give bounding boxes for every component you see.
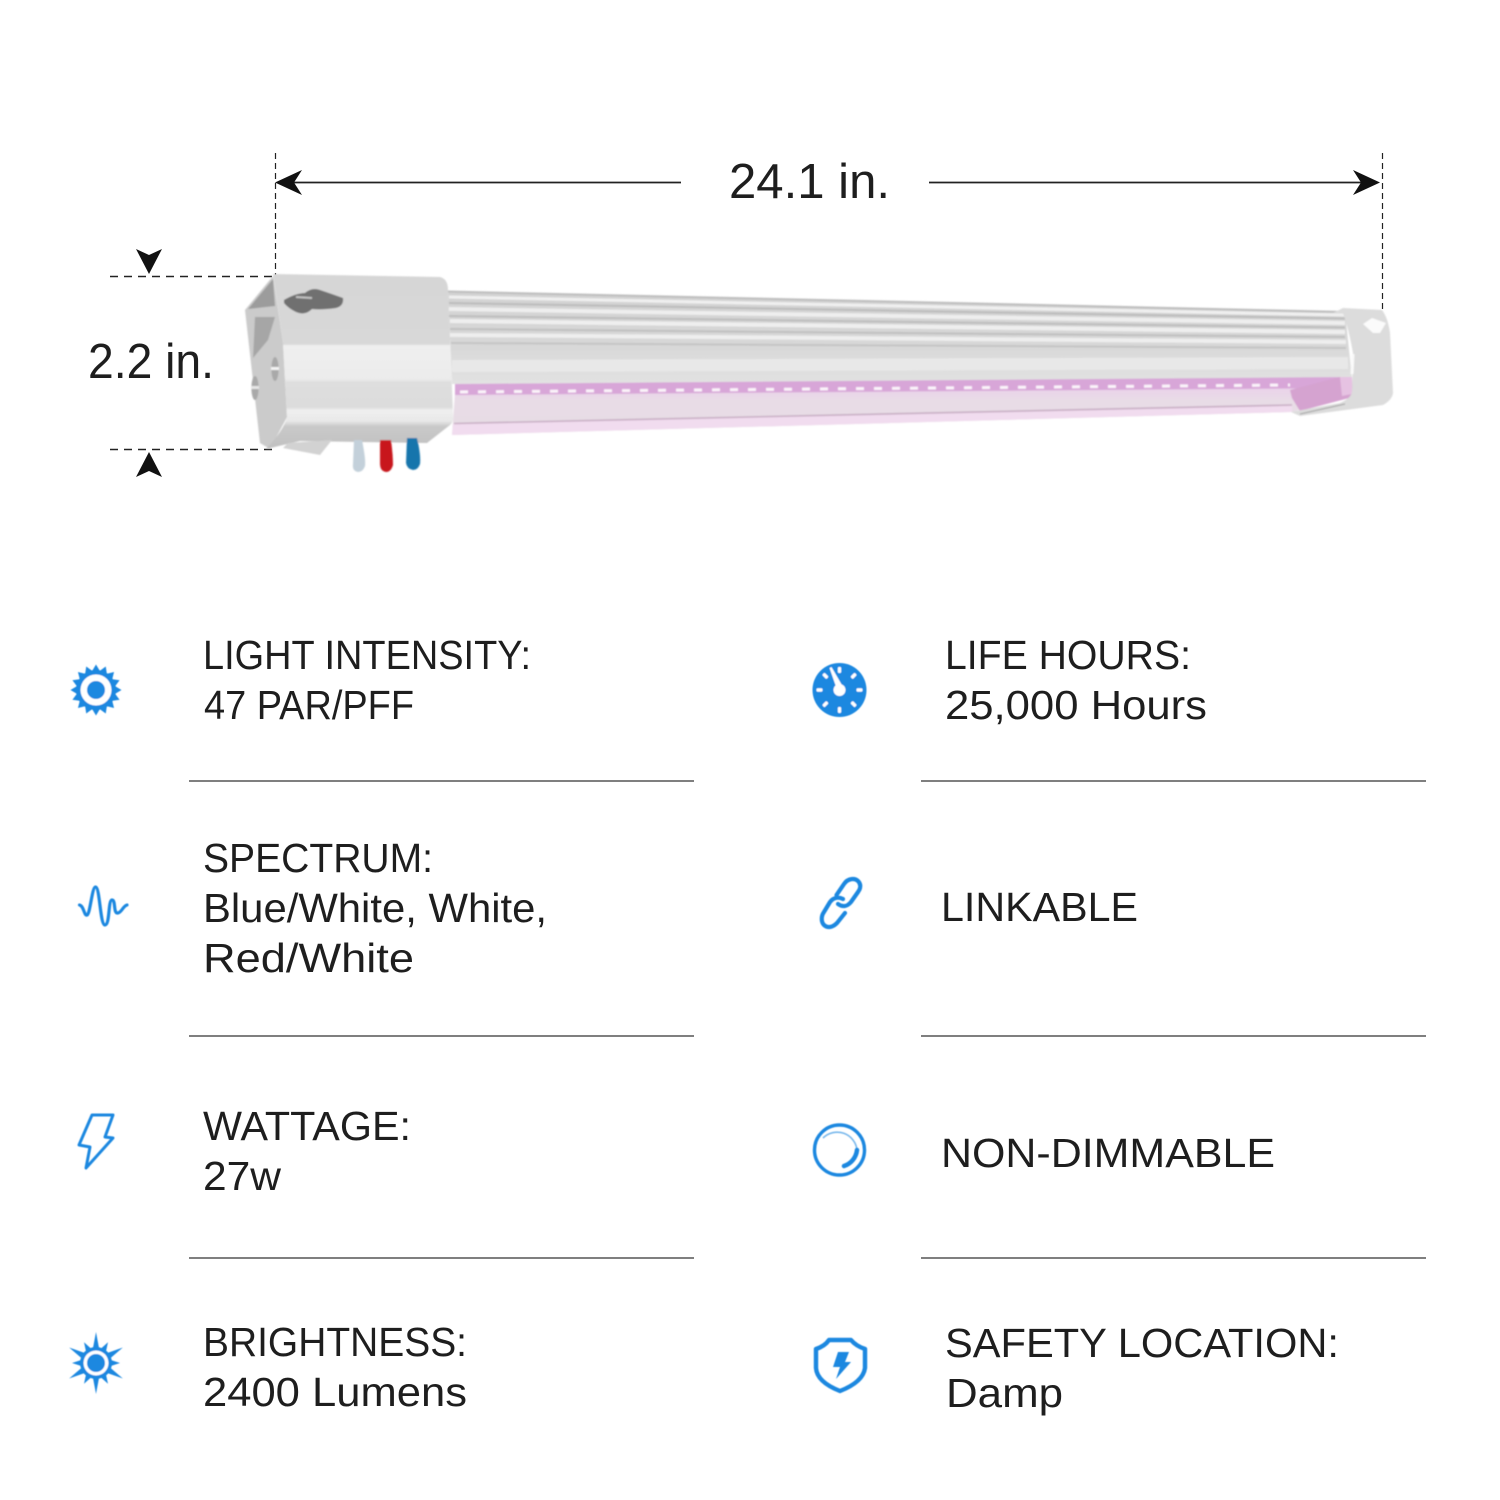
icon: shield with bolt (safety location) bbox=[816, 1340, 865, 1391]
icon: lightning bolt (wattage) bbox=[79, 1115, 113, 1168]
text: brightness: BRIGHTNESS: bbox=[203, 1319, 467, 1365]
icon: waveform (spectrum) bbox=[80, 887, 127, 925]
icon: sun (light intensity) bbox=[70, 664, 122, 716]
text: wattage: WATTAGE: bbox=[203, 1103, 411, 1149]
cap clip bbox=[283, 440, 332, 455]
dimension: height 2.2 in. bbox=[88, 249, 275, 477]
glass lower pink edge bbox=[452, 405, 1292, 435]
dimension: width 24.1 in. bbox=[275, 153, 1382, 310]
wire grey bbox=[353, 440, 365, 472]
text: wattage bbox=[203, 1103, 411, 1199]
dimension: width 24.1 in.: 24.1 in. bbox=[729, 155, 890, 209]
LED dots bbox=[460, 385, 1290, 392]
text: safety location bbox=[945, 1320, 1339, 1416]
product: LED grow light tube bbox=[245, 274, 1393, 472]
left end cap front face bbox=[266, 274, 453, 449]
text: brightness: 2400 Lumens bbox=[203, 1369, 467, 1415]
text: spectrum: SPECTRUM: bbox=[203, 835, 433, 881]
text: light intensity: 47 PAR/PFF bbox=[204, 682, 414, 728]
left end cap side face bbox=[245, 276, 287, 449]
text: non-dimmable: NON-DIMMABLE bbox=[941, 1130, 1275, 1176]
wire red bbox=[380, 440, 393, 472]
text: safety location: Damp bbox=[946, 1370, 1063, 1416]
tube aluminium back bbox=[448, 291, 1352, 384]
icon: gauge (life hours) bbox=[812, 663, 866, 717]
text: linkable: LINKABLE bbox=[941, 884, 1138, 930]
cap mounting hole bbox=[284, 289, 343, 313]
text: brightness bbox=[203, 1319, 467, 1415]
text: wattage: 27w bbox=[203, 1153, 281, 1199]
text: light intensity bbox=[203, 632, 531, 728]
dimension: height 2.2 in.: 2.2 in. bbox=[88, 335, 214, 389]
text: light intensity: LIGHT INTENSITY: bbox=[203, 632, 531, 678]
icon: ring (non-dimmable) bbox=[814, 1125, 864, 1175]
text: life hours: 25,000 Hours bbox=[945, 682, 1207, 728]
pink LED strip bbox=[455, 377, 1352, 395]
tube ridges bbox=[448, 292, 1348, 366]
text: spectrum bbox=[203, 835, 547, 981]
tube glass cover bbox=[452, 387, 1350, 435]
icon: chain link (linkable) bbox=[822, 879, 860, 927]
wire blue bbox=[406, 438, 420, 470]
text: spectrum: Blue/White, White, bbox=[203, 885, 547, 931]
right end cap bbox=[1291, 308, 1393, 416]
text: spectrum: Red/White bbox=[203, 935, 414, 981]
text: life hours bbox=[945, 632, 1207, 728]
text: life hours: LIFE HOURS: bbox=[945, 632, 1191, 678]
icon: bright sun (brightness) bbox=[68, 1332, 124, 1394]
row dividers bbox=[189, 781, 1426, 1258]
text: safety location: SAFETY LOCATION: bbox=[945, 1320, 1339, 1366]
far end inner pink sleeve bbox=[1290, 377, 1353, 411]
